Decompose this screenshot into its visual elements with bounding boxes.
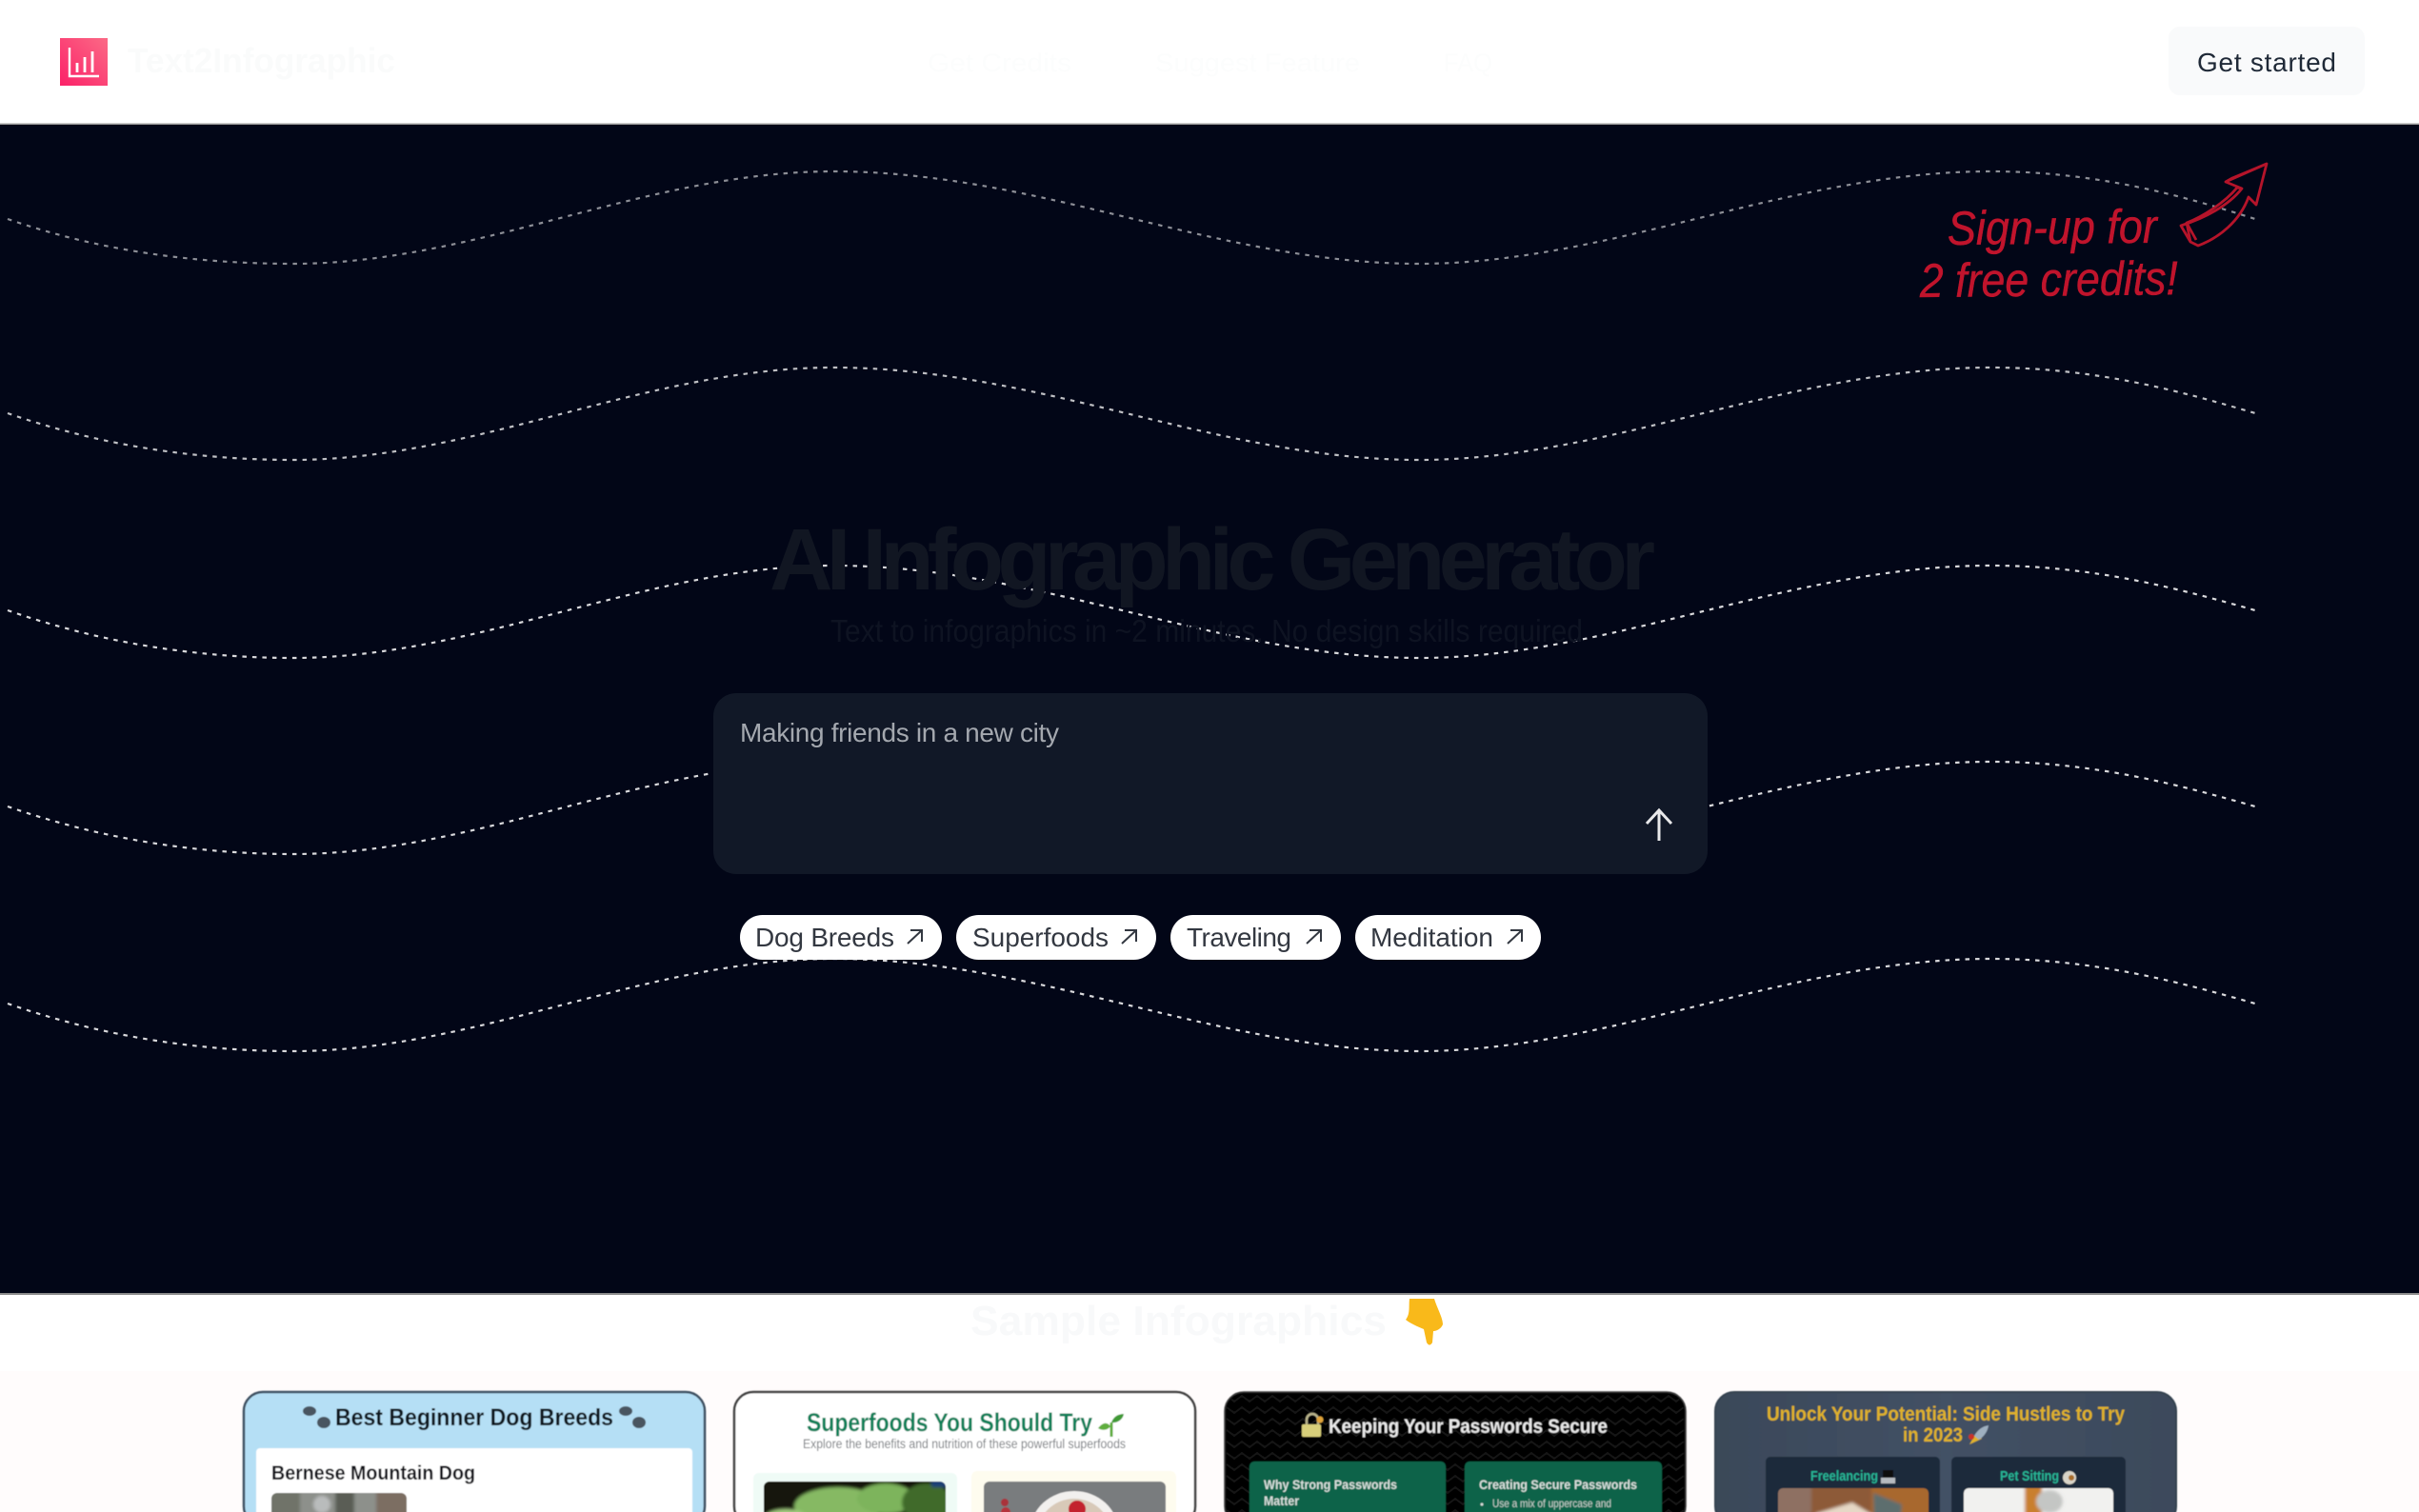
breed panel	[256, 1448, 692, 1512]
icon: pointing down hand	[1406, 1299, 1443, 1344]
main heading: AI Infographic Generator	[770, 511, 1655, 608]
photo: bowl	[984, 1482, 1166, 1512]
chip: Superfoods: Superfoods	[972, 923, 1109, 952]
panel: why strong passwords matter	[1249, 1462, 1446, 1512]
chip: Meditation: Meditation	[1370, 923, 1493, 952]
icon: rocket	[1969, 1425, 1989, 1444]
card title: Unlock Your Potential: Side Hustles to Try	[1767, 1403, 2125, 1425]
icon: submit arrow	[1647, 810, 1671, 841]
card title: Best Beginner Dog Breeds	[335, 1404, 613, 1431]
panel: creating secure passwords	[1465, 1462, 1662, 1512]
section background	[0, 1371, 2419, 1512]
nav link: Suggest Feature: Suggest Feature	[1155, 49, 1360, 77]
photo: dog	[270, 1492, 408, 1512]
nav link: FAQ: FAQ	[1444, 49, 1492, 77]
chip: Traveling	[1170, 915, 1341, 960]
prompt input	[713, 693, 1708, 874]
photo: laptop on desk	[1777, 1487, 1929, 1512]
navigation bar	[0, 0, 2419, 125]
panel: why strong passwords matter: Matter	[1264, 1493, 1299, 1508]
chip: Meditation	[1355, 915, 1541, 960]
panel: freelancing: Freelancing	[1810, 1468, 1878, 1484]
panel: freelancing	[1766, 1457, 1940, 1512]
callout: sign-up text: 2 free credits!	[1919, 251, 2178, 308]
prompt input: Making friends in a new city	[740, 718, 1059, 747]
chip: Superfoods	[956, 915, 1156, 960]
wave 1	[8, 171, 2255, 264]
chip: Traveling: Traveling	[1187, 923, 1291, 952]
panel: creating secure passwords: Use a mix of uppercase and	[1492, 1497, 1611, 1510]
icon: logo	[60, 38, 108, 86]
wave 3	[8, 566, 2255, 658]
panel: creating secure passwords: Creating Secure Passwords	[1479, 1477, 1637, 1492]
icon: right paws	[619, 1406, 646, 1428]
wave 4	[8, 762, 2255, 854]
wave 5	[8, 959, 2255, 1051]
icon: sprout	[1098, 1414, 1124, 1437]
button: Get started: Get started	[2197, 48, 2336, 77]
card: side hustles	[1715, 1392, 2176, 1512]
hero panel	[0, 125, 2419, 1295]
icon: red hand-drawn arrow	[2181, 164, 2267, 246]
panel: pet sitting: Pet Sitting	[2000, 1468, 2059, 1484]
photo: dog	[1963, 1487, 2114, 1512]
card title: Keeping Your Passwords Secure	[1329, 1416, 1608, 1438]
icon: lock and key	[1302, 1414, 1324, 1437]
icon: left paws	[303, 1406, 330, 1428]
button: Get started	[2169, 27, 2365, 95]
callout: sign-up text	[1919, 200, 2178, 308]
chip: Dog Breeds: Dog Breeds	[755, 923, 894, 952]
suggestion chips	[740, 915, 1541, 960]
nav link: Get Credits: Get Credits	[928, 49, 1071, 77]
panel: pet sitting	[1951, 1457, 2126, 1512]
card: passwords	[1225, 1392, 1686, 1512]
card: superfoods	[734, 1392, 1195, 1512]
photo: greens	[763, 1481, 947, 1512]
card title	[1767, 1403, 2125, 1446]
card subtitle: Explore the benefits and nutrition of these powerful superfoods	[803, 1437, 1126, 1451]
wave 2	[8, 368, 2255, 460]
section heading: Sample Infographics	[970, 1298, 1387, 1344]
brand name: Text2Infographic	[128, 41, 395, 80]
icon: laptop	[1881, 1470, 1895, 1483]
panel: bowl	[971, 1471, 1176, 1512]
callout: sign-up text: Sign-up for	[1948, 200, 2159, 255]
subtitle: Text to infographics in ~2 minutes. No design skills required	[830, 613, 1583, 648]
card title: in 2023	[1903, 1424, 1963, 1446]
card: dog breeds	[244, 1392, 705, 1512]
card title: Superfoods You Should Try	[807, 1408, 1092, 1437]
panel: greens	[753, 1473, 957, 1512]
breed panel: Bernese Mountain Dog	[271, 1462, 475, 1484]
panel: why strong passwords matter: Why Strong Passwords	[1264, 1477, 1397, 1492]
chip: Dog Breeds	[740, 915, 942, 960]
icon: dog face	[2063, 1471, 2076, 1484]
